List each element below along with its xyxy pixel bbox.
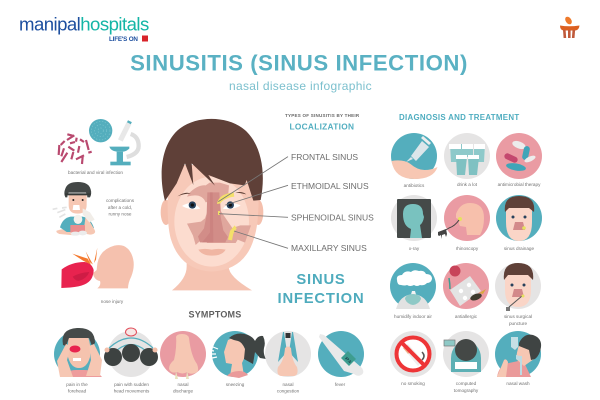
caption: complications after a cold, runny nose: runny nose [109, 212, 132, 216]
icon: sinus drainage [496, 195, 542, 241]
icon: bacteria [59, 134, 92, 164]
logo: manipal hospitals: LIFE'S ON [109, 36, 138, 43]
icon: fever thermometer [318, 331, 364, 377]
caption: nasal discharge: nasal [177, 382, 189, 387]
panel: treatment [390, 133, 542, 393]
eyes [182, 203, 200, 209]
caption: computed tomography: tomography [454, 388, 479, 393]
illustrations: causes [53, 119, 139, 288]
mouth [198, 249, 226, 256]
icon: sneezing [208, 331, 266, 378]
icon: humidify indoor air [390, 263, 436, 309]
icon: antiallergic [443, 263, 489, 309]
heading: symptoms: SYMPTOMS [189, 310, 241, 320]
caption: sinus surgical puncture [504, 314, 532, 326]
icon: microscope [109, 120, 139, 165]
labels: sinus types: ETHMOIDAL SINUS [291, 181, 369, 191]
icon: orange corner emblem [560, 15, 580, 38]
neck and shoulders [172, 255, 252, 290]
caption: nasal discharge: discharge [173, 388, 193, 394]
caption: sneezing: sneezing [226, 382, 245, 387]
caption: nasal congestion [277, 382, 300, 394]
logo: manipal hospitals: manipalhospitals [19, 14, 149, 34]
panel: causes [53, 119, 139, 304]
caption: pain in the forehead: forehead [68, 388, 87, 394]
caption: antimicrobial therapy: antimicrobial therapy [498, 182, 541, 187]
caption: complications after a cold, runny nose: complications [106, 198, 135, 203]
icon: drink a lot [444, 133, 490, 179]
caption: humidify indoor air: humidify indoor air [394, 314, 432, 319]
caption: drink a lot: drink a lot [457, 182, 478, 187]
hair [162, 119, 263, 201]
icon: man with runny nose [53, 182, 95, 236]
caption: computed tomography: computed [456, 381, 477, 386]
caption: fever: fever [335, 382, 346, 387]
icon: computed tomography [443, 331, 489, 377]
caption: nasal congestion: congestion [277, 388, 300, 394]
labels: sinus types: SPHENOIDAL SINUS [291, 212, 374, 222]
icon: x-ray [391, 195, 437, 241]
icon: fever thermometer: 37.5 [344, 356, 352, 364]
icon: nasal discharge [160, 331, 206, 379]
icon: antibiotics [391, 133, 438, 179]
caption: nasal congestion: nasal [282, 382, 294, 387]
icon: antimicrobial therapy [496, 133, 542, 179]
caption: computed tomography [454, 381, 479, 393]
icon: no smoking [390, 331, 436, 377]
panel: symptoms [54, 328, 364, 394]
yellow sinus highlights [217, 192, 234, 204]
caption: complications after a cold, runny nose [106, 198, 135, 216]
ears [161, 200, 171, 225]
icon: rhinoscopy [438, 195, 490, 241]
labels: sinus types [291, 152, 374, 253]
labels: sinus types: MAXILLARY SINUS [291, 243, 367, 253]
caption: bacterial and viral infection: bacterial and viral infection [68, 170, 123, 175]
title: SINUSITIS (SINUS INFECTION) [130, 50, 468, 76]
labels: sinus types: FRONTAL SINUS [291, 152, 358, 162]
heading: sinus infection: INFECTION [278, 291, 364, 307]
caption: x-ray: x-ray [409, 246, 420, 251]
heading: localization: TYPES OF SINUSITIS BY THEIR [285, 113, 360, 118]
caption: rhinoscopy: rhinoscopy [456, 246, 479, 251]
subtitle: nasal disease infographic [229, 79, 372, 93]
caption: pain with sudden head movements: pain with sudden [114, 382, 149, 387]
caption: complications after a cold, runny nose: after a cold, [108, 205, 132, 210]
icon: nose injury [61, 245, 134, 288]
heading: localization: LOCALIZATION [290, 122, 354, 132]
icon: nasal wash [495, 331, 541, 377]
heading: sinus infection: SINUS [296, 272, 346, 288]
leader lines [218, 157, 288, 248]
heading: sinus infection [278, 272, 364, 307]
caption: pain with sudden head movements [114, 382, 150, 394]
caption: antiallergic: antiallergic [455, 314, 478, 319]
caption: sinus surgical puncture: sinus surgical [504, 314, 532, 319]
caption: antibiotics: antibiotics [404, 183, 425, 188]
eyebrows [177, 192, 246, 196]
caption: pain in the forehead [66, 382, 88, 394]
icon: pain with head movements [104, 328, 158, 377]
icon: sinus surgical puncture [495, 263, 541, 311]
panel: head illustration [161, 119, 288, 290]
caption: pain with sudden head movements: head movements [114, 388, 150, 394]
face [168, 165, 259, 272]
caption: nose injury: nose injury [101, 299, 124, 304]
caption: no smoking: no smoking [401, 381, 425, 386]
caption: sinus surgical puncture: puncture [509, 321, 527, 326]
caption: nasal discharge [173, 382, 193, 394]
heading: diagnosis and treatment: DIAGNOSIS AND TREATMENT [399, 113, 519, 122]
caption: pain in the forehead: pain in the [66, 382, 88, 387]
caption: nasal wash: nasal wash [506, 381, 530, 386]
icon: virus [89, 119, 112, 142]
heading: localization [285, 113, 360, 132]
icon: pain in the forehead [54, 328, 102, 377]
icon: nasal congestion [265, 331, 311, 377]
sinuses [187, 183, 251, 245]
caption: sinus drainage: sinus drainage [504, 246, 535, 251]
